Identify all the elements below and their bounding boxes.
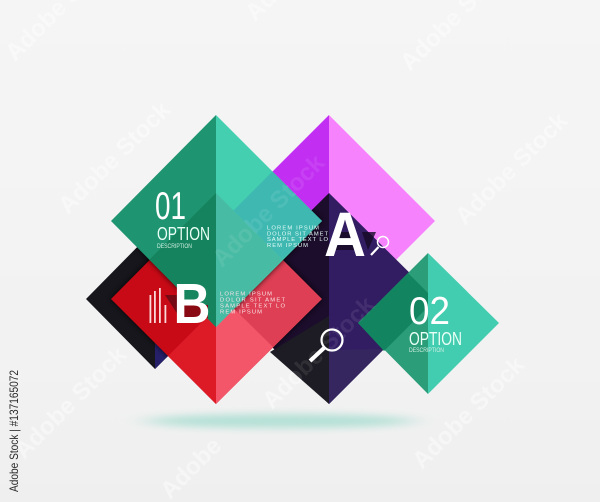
watermarks over shapes: Adobe Stock	[207, 149, 330, 272]
icon: large magnifier	[310, 330, 342, 361]
watermarks over shapes	[9, 149, 380, 464]
panel: dark purple diamond	[223, 193, 435, 404]
floor shadow	[145, 414, 415, 428]
shadow of red diamond	[112, 260, 322, 358]
watermarks: Adobe Stock	[407, 351, 530, 474]
watermarks over shapes: Adobe Stock	[9, 341, 132, 464]
text block: lorem teal: LOREM IPSUM	[267, 226, 319, 232]
heading: option 2: OPTION	[409, 329, 462, 349]
description 2: DESCRIPTION	[409, 347, 444, 354]
panel: green diamond 02	[358, 253, 499, 394]
text block: lorem red: REM IPSUM	[220, 310, 262, 316]
side credit: Adobe Stock | #137165072	[7, 370, 21, 492]
heading: 01: 01	[155, 185, 186, 228]
text block: lorem red: LOREM IPSUM	[220, 292, 272, 298]
letter B: B	[174, 272, 210, 336]
watermarks: Adobe Stock	[9, 341, 132, 464]
shadow of green diamond	[136, 208, 322, 312]
panel: green diamond 01	[111, 115, 322, 327]
text block: lorem red: DOLOR SIT AMET	[220, 298, 285, 304]
panel: black diamond left	[86, 229, 225, 369]
icon: small magnifier	[371, 236, 388, 255]
text block: lorem teal: SAMPLE TEXT LO	[267, 237, 328, 243]
panel: pink diamond	[223, 115, 435, 327]
watermarks: Adobe Stock	[450, 107, 573, 230]
description 1: DESCRIPTION	[157, 243, 192, 250]
watermarks over shapes: Adobe Stock	[257, 291, 380, 414]
watermarks: Adobe Stock	[257, 291, 380, 414]
text block: lorem teal: DOLOR SIT AMET	[267, 232, 328, 238]
text block: lorem teal	[267, 226, 328, 249]
text block: lorem red	[220, 292, 285, 316]
letter A: A	[324, 200, 366, 270]
heading: 02: 02	[409, 290, 450, 333]
text block: lorem red: SAMPLE TEXT LO	[220, 304, 285, 310]
panel: red diamond	[111, 193, 322, 404]
text block: lorem teal: REM IPSUM	[267, 243, 308, 249]
icon: bars	[150, 288, 166, 323]
heading: option 1: OPTION	[157, 224, 210, 244]
watermarks: Adobe Stock	[53, 96, 176, 219]
